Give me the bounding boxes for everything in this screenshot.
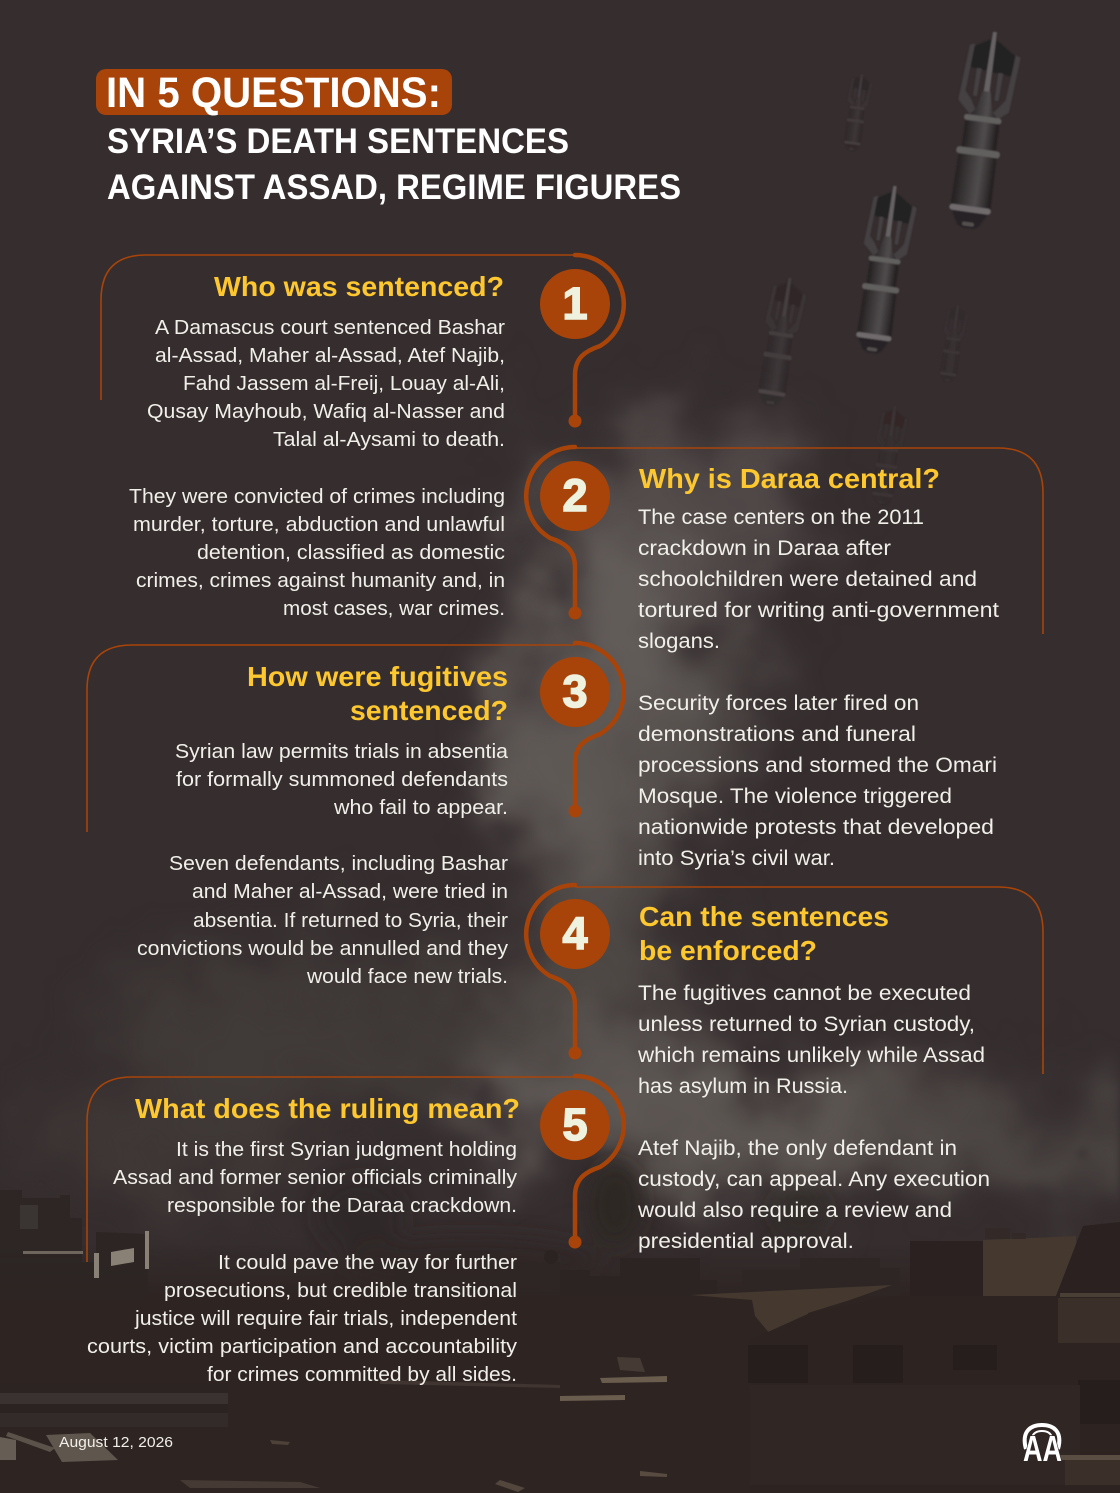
photo: ruined city skyline [0, 1183, 1120, 1493]
body text: Talal al-Aysami to death. [273, 428, 505, 451]
body text: convictions would be annulled and they [137, 937, 509, 960]
panel outline [575, 887, 1043, 1074]
connector [575, 1076, 624, 1242]
body text: A Damascus court sentenced Bashar [155, 316, 505, 339]
body text: nationwide protests that developed [638, 815, 994, 839]
number: 5 [562, 1099, 588, 1150]
body text: justice will require fair trials, independent [134, 1307, 517, 1330]
icon: bomb faint lower [868, 404, 909, 506]
icon: bomb faint right [937, 304, 969, 383]
number badge [540, 1090, 610, 1160]
body text: has asylum in Russia. [638, 1074, 848, 1098]
number: 4 [562, 908, 588, 959]
body text: which remains unlikely while Assad [637, 1043, 985, 1067]
number badge [540, 461, 610, 531]
illustration: falling bombs [753, 28, 1024, 506]
body text: unless returned to Syrian custody, [638, 1012, 975, 1036]
panel outline [575, 448, 1043, 634]
body text: prosecutions, but credible transitional [164, 1279, 517, 1302]
connector [526, 447, 575, 613]
panel: question 3 [87, 643, 624, 988]
body text: Fahd Jassem al-Freij, Louay al-Ali, [183, 372, 505, 395]
right ledge [1060, 1455, 1120, 1460]
heading: Why is Daraa central? [639, 463, 940, 494]
panel: question 2 [526, 447, 1043, 870]
debris [180, 1357, 667, 1492]
body text [637, 981, 990, 1253]
heading: Who was sentenced? [214, 271, 504, 302]
number badge [540, 657, 610, 727]
left strips [0, 1383, 228, 1393]
body text: murder, torture, abduction and unlawful [133, 513, 505, 536]
body text: presidential approval. [638, 1229, 854, 1253]
heading: Can the sentences [639, 901, 889, 932]
left ruins [0, 1183, 148, 1300]
right dark building [1056, 1222, 1120, 1296]
body text: The fugitives cannot be executed [638, 981, 971, 1005]
body text: would face new trials. [306, 965, 508, 988]
ground fade [0, 1245, 1120, 1295]
body text: al-Assad, Maher al-Assad, Atef Najib, [155, 344, 505, 367]
body text: courts, victim participation and accountability [87, 1335, 518, 1358]
icon: AA logo: AA [1023, 1428, 1062, 1469]
connector dot [568, 804, 582, 818]
body text: The case centers on the 2011 [638, 505, 924, 529]
body text: crackdown in Daraa after [638, 536, 891, 560]
connector dot [568, 1236, 582, 1248]
body text: It could pave the way for further [218, 1251, 517, 1274]
heading: sentenced? [350, 695, 508, 726]
body text: custody, can appeal. Any execution [638, 1167, 990, 1191]
body text: responsible for the Daraa crackdown. [167, 1194, 517, 1217]
body text: Mosque. The violence triggered [638, 784, 952, 808]
body text [87, 1138, 518, 1386]
connector [575, 255, 624, 421]
body text: crimes, crimes against humanity and, in [136, 569, 505, 592]
panel outline [101, 255, 575, 400]
body text: tortured for writing anti-government [638, 598, 999, 622]
date: August 12, 2026 [59, 1435, 173, 1451]
title [96, 69, 681, 207]
body text [137, 740, 509, 988]
icon: bomb faint left [753, 275, 809, 408]
body text [129, 316, 505, 620]
heading: What does the ruling mean? [135, 1093, 520, 1124]
panel: question 4 [526, 885, 1043, 1253]
title line 2: AGAINST ASSAD, REGIME FIGURES [107, 168, 681, 207]
connector dot [568, 1046, 582, 1060]
body text: Assad and former senior officials criminally [113, 1166, 518, 1189]
heading: How were fugitives [247, 661, 508, 692]
body text: slogans. [638, 629, 720, 653]
body text: Seven defendants, including Bashar [169, 852, 508, 875]
icon: bomb faint top [841, 73, 873, 152]
body text: Qusay Mayhoub, Wafiq al-Nasser and [147, 400, 505, 423]
body text: Atef Najib, the only defendant in [638, 1136, 957, 1160]
body text: absentia. If returned to Syria, their [193, 909, 508, 932]
connector [526, 885, 575, 1053]
body text: for crimes committed by all sides. [207, 1363, 517, 1386]
middle skyline [395, 1250, 560, 1295]
body text: They were convicted of crimes including [129, 485, 505, 508]
body text: demonstrations and funeral [638, 722, 916, 746]
body text: It is the first Syrian judgment holding [176, 1138, 517, 1161]
connector dot [568, 414, 582, 428]
heading: be enforced? [639, 935, 817, 966]
heading [247, 661, 508, 726]
heading [639, 901, 889, 966]
body text: schoolchildren were detained and [638, 567, 977, 591]
brick ledge [690, 1285, 892, 1334]
number: 3 [562, 666, 588, 717]
body text: and Maher al-Assad, were tried in [192, 880, 508, 903]
title badge [96, 69, 452, 115]
number badge [540, 269, 610, 339]
panel outline [87, 645, 575, 832]
body text: would also require a review and [637, 1198, 952, 1222]
body text: who fail to appear. [333, 796, 508, 819]
body text [638, 505, 999, 870]
dark building [910, 1241, 983, 1297]
title highlight text: IN 5 QUESTIONS: [106, 69, 441, 117]
number badge [540, 899, 610, 969]
connector dot [568, 606, 582, 620]
panel: question 5 [87, 1076, 624, 1386]
body text: for formally summoned defendants [176, 768, 508, 791]
panel: question 1 [101, 255, 624, 620]
corrugated roofs [0, 1437, 16, 1460]
body text: Syrian law permits trials in absentia [175, 740, 509, 763]
body text: detention, classified as domestic [197, 541, 505, 564]
lower building walls [750, 1296, 1120, 1493]
title line 1: SYRIA’S DEATH SENTENCES [107, 122, 569, 161]
body text: Security forces later fired on [638, 691, 919, 715]
number: 2 [562, 470, 588, 521]
panel outline [87, 1077, 575, 1262]
icon: bomb large top [941, 28, 1024, 232]
body text: most cases, war crimes. [283, 597, 505, 620]
connector [575, 643, 624, 811]
number: 1 [562, 278, 588, 329]
brick building [983, 1236, 1076, 1297]
icon: bomb middle [849, 183, 919, 356]
body text: processions and stormed the Omari [638, 753, 997, 777]
body text: into Syria’s civil war. [638, 846, 835, 870]
